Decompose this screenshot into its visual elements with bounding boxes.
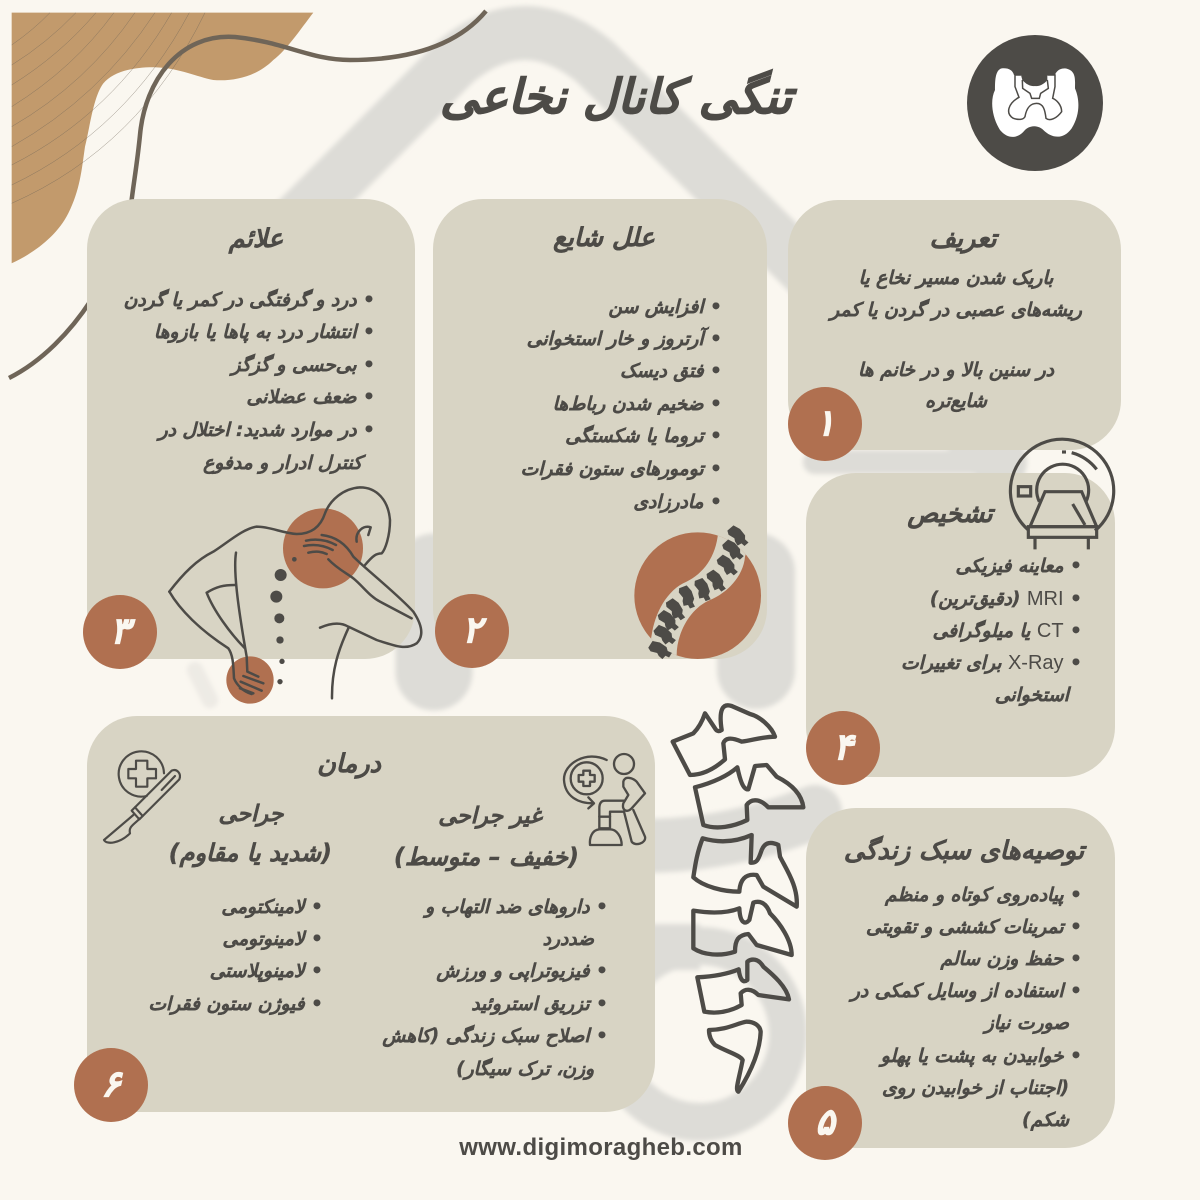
illustration: curved spine in circle xyxy=(634,526,761,660)
number badge 1 xyxy=(788,387,862,461)
definition text xyxy=(828,268,1082,412)
heading: common causes: علل شایع xyxy=(553,223,655,253)
illustration: lumbar vertebrae outline xyxy=(670,703,806,1094)
non-surgical list: ضددرد xyxy=(543,929,594,950)
causes list: • تومورهای ستون فقرات xyxy=(521,459,722,480)
definition text: در سنین بالا و در خانم ها xyxy=(858,360,1054,381)
definition text: باریک شدن مسیر نخاع یا xyxy=(859,268,1053,289)
symptoms list: • درد و گرفتگی در کمر یا گردن xyxy=(124,290,375,311)
surgical list: • فیوژن ستون فقرات xyxy=(148,994,323,1015)
panel: definition xyxy=(788,200,1121,450)
number badge 1: ۱ xyxy=(815,403,835,444)
lifestyle list: • پیاده‌روی کوتاه و منظم xyxy=(885,885,1082,906)
non-surgical list xyxy=(382,897,608,1080)
number badge 2 xyxy=(435,594,509,668)
panel: lifestyle recommendations xyxy=(806,808,1115,1148)
subheading: surgical: جراحی xyxy=(219,801,283,827)
surgical list: • لامینوپلاستی xyxy=(210,961,323,982)
icon: physiotherapy patient xyxy=(562,752,646,846)
non-surgical list: • فیزیوتراپی و ورزش xyxy=(436,961,608,982)
causes list: • فتق دیسک xyxy=(620,361,722,382)
diagnosis list: استخوانی xyxy=(995,685,1069,706)
causes list xyxy=(521,297,722,514)
number badge 4 xyxy=(806,711,880,785)
number badge 6 xyxy=(74,1048,148,1122)
non-surgical list: • داروهای ضد التهاب و xyxy=(425,897,608,918)
causes list: • مادرزادی xyxy=(633,492,722,513)
surgical list: • لامینوتومی xyxy=(222,929,323,950)
surgical list: • لامینکتومی xyxy=(221,897,323,918)
diagnosis list: • معاینه فیزیکی xyxy=(955,556,1082,577)
surgical list xyxy=(148,897,323,1016)
heading: symptoms: علائم xyxy=(229,224,283,254)
symptoms list: • در موارد شدید: اختلال در xyxy=(159,420,375,441)
diagnosis list: • CT یا میلوگرافی xyxy=(933,620,1082,642)
panel: treatment xyxy=(87,716,655,1112)
note: severe or resistant: (شدید یا مقاوم) xyxy=(169,839,332,867)
number badge 3: ۳ xyxy=(110,611,130,652)
lifestyle list: (اجتناب از خوابیدن روی xyxy=(882,1078,1069,1099)
lifestyle list: صورت نیاز xyxy=(985,1013,1069,1034)
symptoms list: • ضعف عضلانی xyxy=(247,387,375,408)
number badge 5: ۵ xyxy=(815,1102,835,1143)
number badge 5 xyxy=(788,1086,862,1160)
symptoms list xyxy=(124,288,375,474)
column: non-surgical xyxy=(382,803,608,1080)
lifestyle list: • حفظ وزن سالم xyxy=(941,949,1082,970)
causes list: • ضخیم شدن رباط‌ها xyxy=(553,394,722,415)
icon: pelvis and spine in dark circle xyxy=(967,35,1103,171)
lifestyle list: • استفاده از وسایل کمکی در xyxy=(851,981,1082,1002)
note: mild to moderate: (خفیف – متوسط) xyxy=(394,843,579,871)
diagnosis list: • MRI (دقیق‌ترین) xyxy=(930,588,1082,610)
icon: scalpel with medical cross xyxy=(102,750,181,844)
number badge 6: ۶ xyxy=(101,1064,121,1105)
lifestyle list: • خوابیدن به پشت یا پهلو xyxy=(881,1046,1082,1067)
non-surgical list: وزن، ترک سیگار) xyxy=(456,1059,594,1080)
panel: common causes xyxy=(433,199,767,659)
heading: definition: تعریف xyxy=(930,224,996,254)
number badge 4: ۴ xyxy=(833,727,853,768)
symptoms list: کنترل ادرار و مدفوع xyxy=(203,453,362,474)
heading: lifestyle recommendations: توصیه‌های سبک زندگی xyxy=(844,836,1084,866)
panel: symptoms xyxy=(87,199,415,659)
footer website url: www.digimoragheb.com xyxy=(459,1134,743,1161)
definition text: شایع‌تره xyxy=(925,391,987,412)
lifestyle list: • تمرینات کششی و تقویتی xyxy=(866,917,1082,938)
icon: MRI scanner xyxy=(1008,438,1116,550)
heading: diagnosis: تشخیص xyxy=(907,499,993,529)
title: تنگی کانال نخاعی xyxy=(440,70,792,125)
heading: treatment: درمان xyxy=(317,749,381,779)
causes list: • آرتروز و خار استخوانی xyxy=(527,329,722,350)
number badge 3 xyxy=(83,595,157,669)
definition text: ریشه‌های عصبی در گردن یا کمر xyxy=(830,300,1082,321)
symptoms list: • بی‌حسی و گزگز xyxy=(232,355,375,376)
column: surgical xyxy=(148,801,332,1016)
causes list: • افزایش سن xyxy=(608,297,722,318)
non-surgical list: • اصلاح سبک زندگی (کاهش xyxy=(382,1026,608,1047)
non-surgical list: • تزریق استروئید xyxy=(471,994,608,1015)
lifestyle list: شکم) xyxy=(1022,1110,1069,1131)
lifestyle list xyxy=(848,885,1082,1131)
number badge 2: ۲ xyxy=(462,610,482,651)
subheading: non-surgical: غیر جراحی xyxy=(438,803,542,829)
causes list: • تروما یا شکستگی xyxy=(565,426,722,447)
diagnosis list: • X-Ray برای تغییرات xyxy=(901,652,1082,674)
diagnosis list xyxy=(901,556,1082,706)
illustration: man with neck and back pain xyxy=(168,486,423,704)
symptoms list: • انتشار درد به پاها یا بازوها xyxy=(154,322,375,343)
panel: diagnosis xyxy=(806,473,1115,777)
